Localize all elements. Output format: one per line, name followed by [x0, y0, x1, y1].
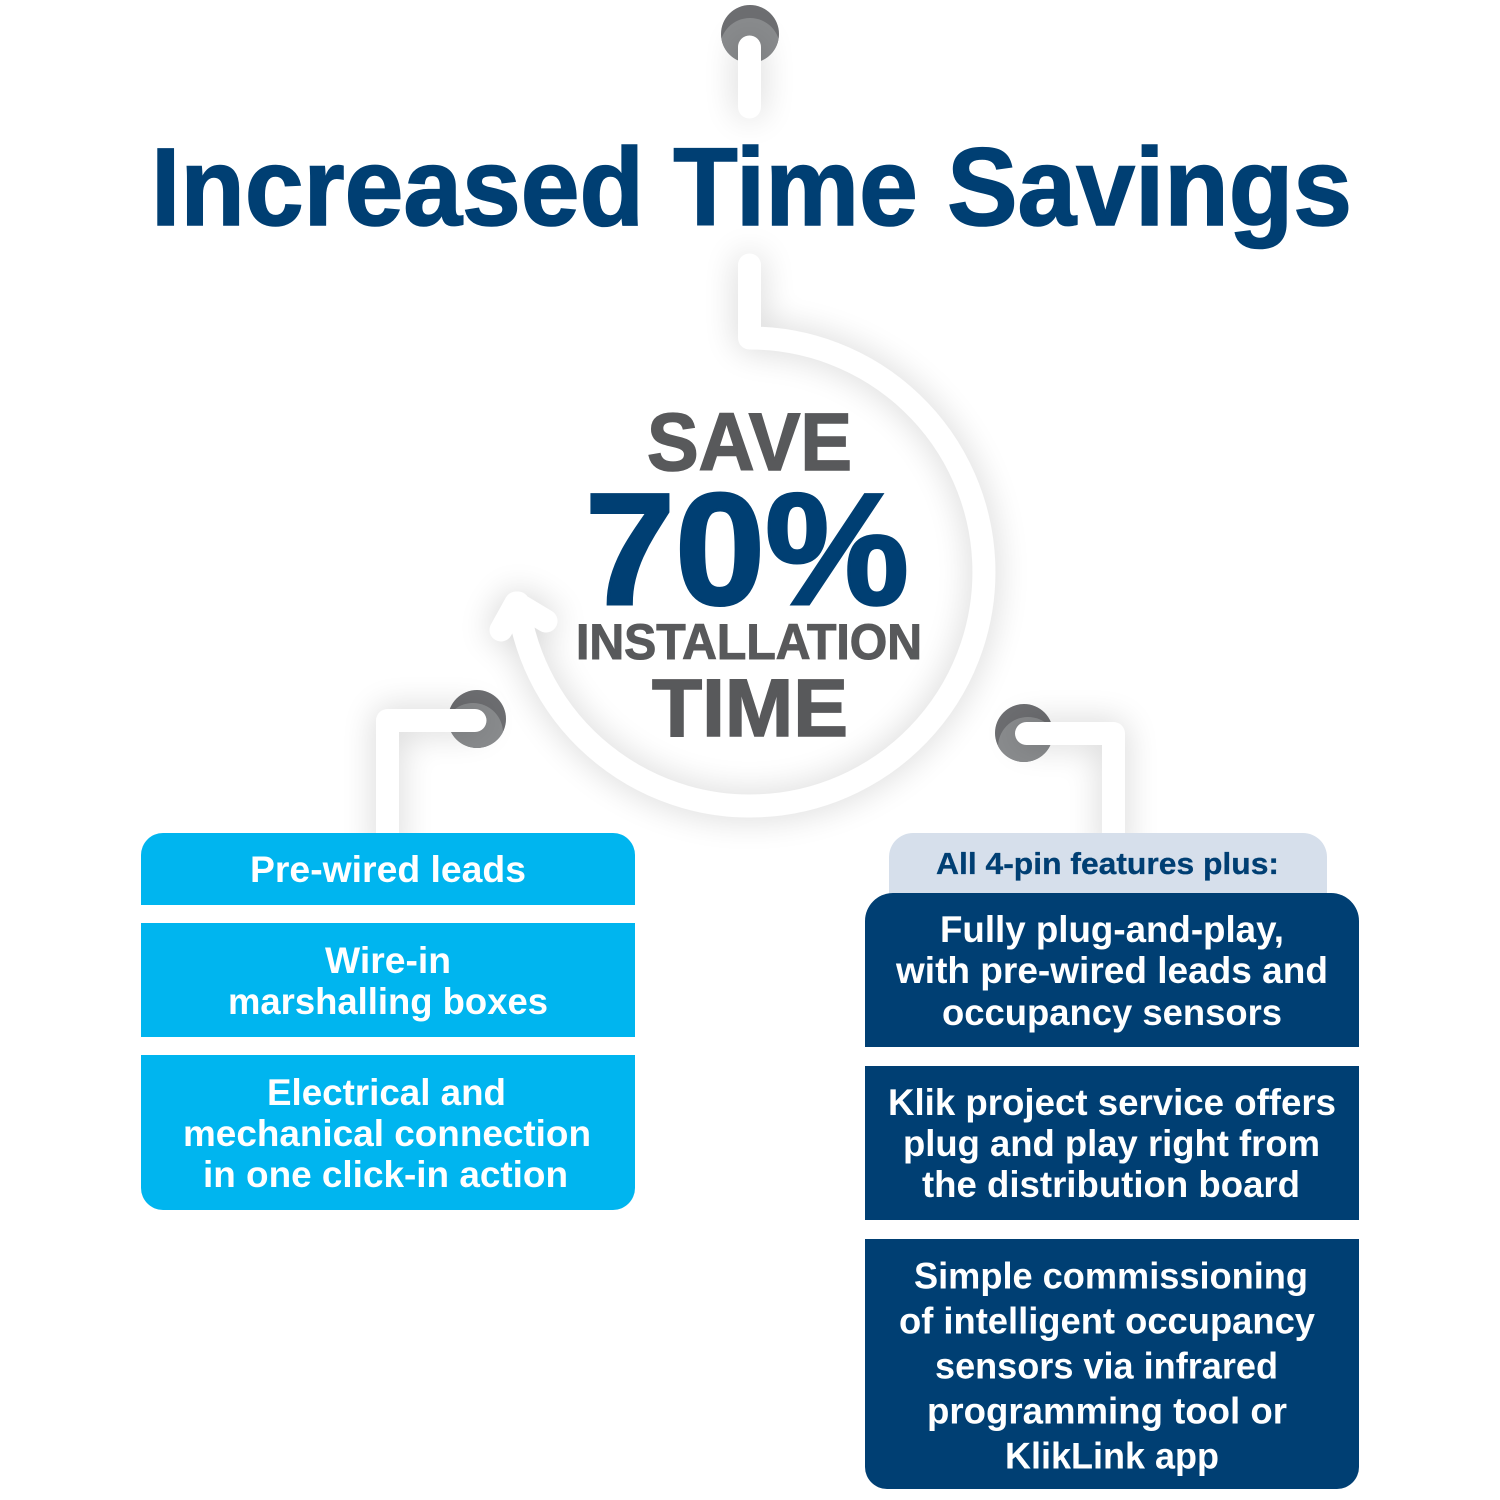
- icon: top connector pin: [720, 5, 780, 107]
- box: pre-wired leads: Pre-wired leads: [250, 849, 526, 890]
- panel: left feature list: [141, 833, 635, 1210]
- box: klik project service: plug and play right from: [903, 1123, 1320, 1164]
- text: save 70% installation time: INSTALLATION: [576, 614, 922, 670]
- icon: left connector pin: [388, 690, 506, 850]
- box: fully plug-and-play: occupancy sensors: [942, 992, 1282, 1033]
- box: simple commissioning: [865, 1239, 1359, 1489]
- box: electrical and mechanical connection: mechanical connection: [183, 1113, 591, 1154]
- box: fully plug-and-play: [865, 893, 1359, 1047]
- text: save 70% installation time: TIME: [652, 663, 848, 754]
- tab: all 4-pin features plus: All 4-pin features plus:: [936, 846, 1279, 881]
- box: simple commissioning: sensors via infrared: [935, 1346, 1278, 1386]
- box: simple commissioning: KlikLink app: [1005, 1436, 1219, 1476]
- panel: right feature list: [865, 833, 1359, 1489]
- box: pre-wired leads: [141, 833, 635, 905]
- box: klik project service: [865, 1066, 1359, 1220]
- box: wire-in marshalling boxes: Wire-in: [325, 940, 451, 981]
- box: electrical and mechanical connection: in one click-in action: [203, 1154, 568, 1195]
- title: Increased Time Savings: [151, 126, 1352, 249]
- box: simple commissioning: of intelligent occupancy: [899, 1300, 1315, 1342]
- box: simple commissioning: programming tool or: [927, 1390, 1287, 1432]
- icon: right connector pin: [995, 704, 1114, 850]
- box: simple commissioning: Simple commissioning: [914, 1256, 1308, 1296]
- box: electrical and mechanical connection: Electrical and: [267, 1072, 506, 1113]
- tab: all 4-pin features plus: [889, 833, 1327, 893]
- box: klik project service: Klik project service offers: [888, 1082, 1336, 1123]
- arrow: circular loop around the savings figure: [501, 265, 984, 806]
- text: save 70% installation time: 70%: [585, 460, 909, 638]
- box: wire-in marshalling boxes: [141, 923, 635, 1037]
- box: klik project service: the distribution board: [922, 1164, 1300, 1205]
- box: fully plug-and-play: with pre-wired leads and: [895, 950, 1328, 991]
- box: wire-in marshalling boxes: marshalling boxes: [228, 981, 548, 1022]
- text: save 70% installation time: SAVE: [647, 397, 852, 488]
- box: fully plug-and-play: Fully plug-and-play,: [940, 909, 1284, 950]
- text: save 70% installation time: [576, 397, 922, 754]
- box: electrical and mechanical connection: [141, 1055, 635, 1210]
